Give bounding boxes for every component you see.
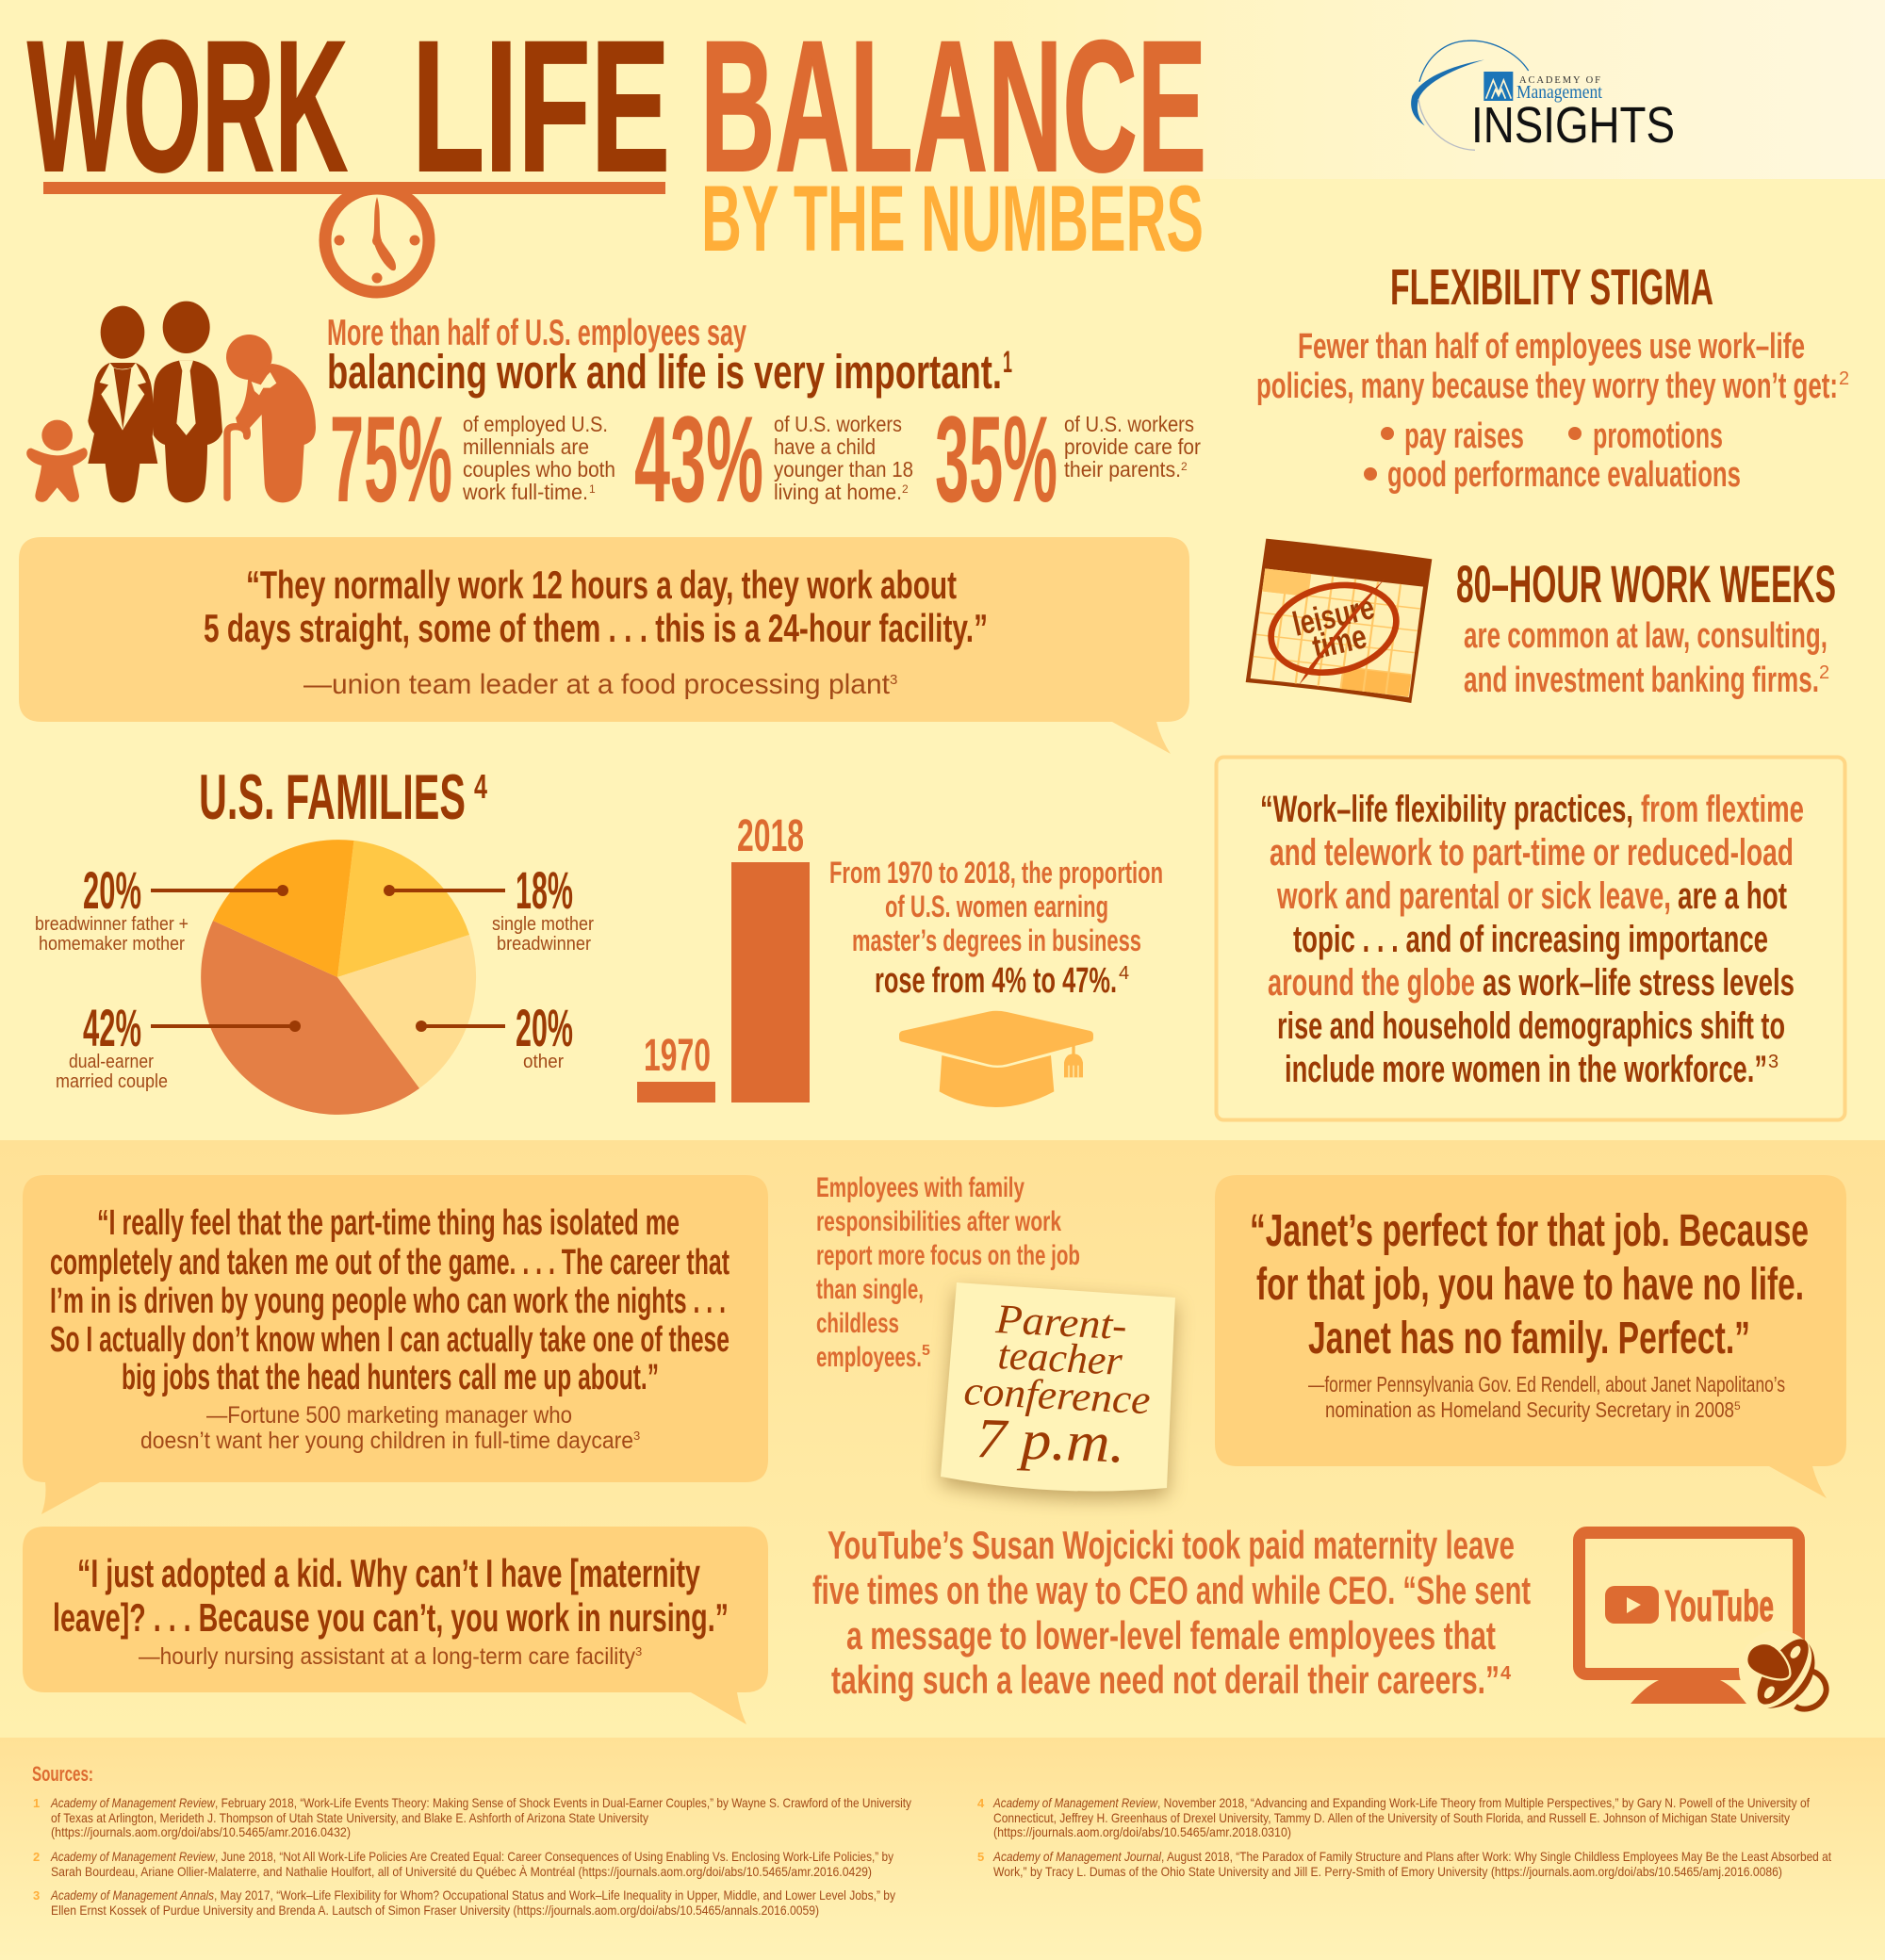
bar chart: women earning master's degrees: 1970 [644,1031,711,1081]
text block: work-life importance: 1 [1003,345,1012,379]
list: what employees worry about: pay raises [1404,416,1524,456]
sticky note: parent-teacher conference: conference [962,1367,1152,1423]
heading: u.s. families: U.S. FAMILIES [199,761,466,833]
callout: union team leader quote [19,537,1189,754]
text block: employees with family responsibilities: childless [816,1308,899,1339]
icon: youtube logo [1605,1581,1774,1630]
list: what employees worry about: promotions [1593,416,1723,456]
label: 20 percent breadwinner father: homemaker mother [39,934,185,955]
statistic: 35 percent: 2 [1181,460,1188,473]
icon: man [153,302,222,502]
label: 20 percent breadwinner father: 20% [83,860,141,920]
text block: sources [32,1762,1831,1918]
list: what employees worry about [1364,416,1741,495]
text block: employees with family responsibilities: Employees with family [816,1172,1024,1203]
source 1 [33,1795,911,1839]
callout: marketing manager quote: —Fortune 500 marketing manager who [206,1402,572,1429]
callout: marketing manager quote: completely and taken me out of the game. . . . The career that [50,1243,729,1282]
callout: janet napolitano quote [1215,1175,1846,1498]
callout: nursing assistant quote [23,1527,768,1724]
statistic: 43 percent: of U.S. workers [774,412,902,436]
callout: marketing manager quote: big jobs that the head hunters call me up about.” [122,1358,659,1397]
source 1: 1 [33,1796,40,1810]
statistic: 35 percent: of U.S. workers [1064,412,1194,436]
icon: pacifier [1739,1630,1827,1712]
icon: elderly man with cane [226,335,316,502]
source 2 [33,1849,893,1879]
callout: marketing manager quote: “I really feel that the part-time thing has isolated me [97,1203,680,1243]
text block: employees with family responsibilities: report more focus on the job [816,1240,1080,1271]
icon: academy of management insights logo: Management [1516,82,1602,103]
heading: u.s. families: 4 [474,767,487,806]
statistic: 75 percent: of employed U.S. [463,412,608,436]
text block: women's master's degrees: From 1970 to 2018, the proportion [829,856,1163,890]
statistic: 35 percent: their parents. [1064,457,1181,482]
label: 20 percent breadwinner father [35,860,288,955]
callout: janet napolitano quote: nomination as Homeland Security Secretary in 2008 [1325,1397,1734,1422]
callout: marketing manager quote: So I actually don’t know when I can actually take one of these [50,1320,729,1360]
icon: graduation cap [899,1011,1093,1107]
title: BY THE NUMBERS [701,166,1204,270]
source 2: Sarah Bourdeau, Ariane Ollier-Malaterre, and Nathalie Houlfort, all of Université du Québec À Montréal (https://journals.aom.org/doi/abs/10.5465/amr.2016.0429) [51,1864,872,1879]
source 1: of Texas at Arlington, Merideth J. Thompson of Utah State University, and Blake E. Ashforth of Arizona State University [51,1810,648,1825]
text block: employees with family responsibilities [816,1172,1080,1373]
text block: policy use: 2 [1839,368,1849,389]
source 3: , May 2017, “Work–Life Flexibility for Whom? Occupational Status and Work–Life Inequality in Upper, Middle, and Lower Level Jobs,” by [214,1887,895,1903]
statistic: 75 percent: work full-time. [462,480,588,504]
source 3: Academy of Management Annals [50,1887,214,1903]
bar chart: women earning master's degrees [637,811,810,1102]
label: 18 percent single mother: single mother [492,914,594,935]
title: WORK [27,2,348,210]
label: 42 percent dual-earner: dual-earner [69,1052,154,1072]
statistic: 43 percent: younger than 18 [774,457,913,482]
text block: employees with family responsibilities: than single, [816,1274,924,1305]
text block: youtube maternity leave [812,1523,1531,1702]
icon: family figures [26,302,316,502]
icon: academy of management insights logo: ACADEMY OF [1519,75,1600,86]
text block: 80-hour work weeks [1456,554,1836,700]
icon: youtube logo: YouTube [1664,1581,1774,1630]
source 1: Academy of Management Review [50,1795,216,1810]
source 3 [33,1887,895,1918]
statistic: 43 percent: 43% [634,390,763,528]
source 4: 4 [977,1796,985,1810]
text block: employees with family responsibilities: 5 [922,1343,930,1359]
source 2: 2 [33,1850,40,1864]
panel: work-life flexibility quote: are a hot [1678,875,1787,917]
text block: women's master's degrees: master’s degrees in business [852,923,1141,957]
statistic: 43 percent: have a child [774,434,876,459]
icon: monitor with youtube logo and pacifier [1580,1532,1827,1712]
callout: nursing assistant quote: leave]? . . . Because you can’t, you work in nursing.” [53,1595,729,1640]
sticky note: parent-teacher conference: teacher [996,1331,1124,1384]
source 3: Ellen Ernst Kossek of Purdue University and Brenda A. Lautsch of Simon Fraser University (https://journals.aom.org/doi/abs/10.5465/annals.2016.0059) [51,1903,819,1918]
source 4: Academy of Management Review [992,1795,1158,1810]
statistic: 43 percent: living at home. [774,480,902,504]
text block: women's master's degrees: rose from 4% to 47%. [875,961,1117,1001]
callout: marketing manager quote [23,1175,768,1514]
text block: youtube maternity leave: five times on the way to CEO and while CEO. “She sent [812,1568,1531,1612]
source 5: 5 [977,1850,984,1864]
text block: work-life importance: balancing work and life is very important. [327,345,1002,399]
text block: women's master's degrees: 4 [1119,963,1129,984]
panel: work-life flexibility quote [1216,758,1845,1119]
title: LIFE [412,2,670,210]
heading: u.s. families [199,761,487,833]
statistic: 35 percent: provide care for [1064,434,1201,459]
text block: youtube maternity leave: 4 [1500,1663,1512,1684]
icon: woman [88,306,157,502]
panel: work-life flexibility quote: from flextime [1641,789,1804,830]
icon: crossed-out leisure time calendar: time [1309,616,1370,666]
source 5: Academy of Management Journal [992,1849,1162,1864]
source 5: Work,” by Tracy L. Dumas of the Ohio State University and Jill E. Perry-Smith of Emory University (https://journals.aom.org/doi/abs/10.5465/amj.2016.0086) [993,1864,1782,1879]
statistic: 75 percent: 75% [330,390,452,528]
text block: women's master's degrees [829,856,1163,1001]
sticky note: parent-teacher conference: 7 p.m. [975,1407,1126,1475]
text block: 80-hour work weeks: 2 [1819,662,1829,683]
icon: academy of management insights logo [1411,41,1675,154]
callout: nursing assistant quote: “I just adopted a kid. Why can’t I have [maternity [77,1551,700,1595]
pie chart: u.s. families [35,840,594,1115]
title [27,2,1206,270]
sticky note: parent-teacher conference: Parent- [993,1296,1128,1348]
text block: youtube maternity leave: YouTube’s Susan Wojcicki took paid maternity leave [828,1523,1515,1567]
label: 42 percent dual-earner [56,998,301,1092]
text block: youtube maternity leave: a message to lower-level female employees that [846,1613,1496,1658]
title: BALANCE [700,2,1206,210]
panel: work-life flexibility quote: work and parental or sick leave, [1276,875,1671,917]
label: 20 percent other: other [523,1052,564,1072]
statistic: 75 percent: 1 [589,482,596,496]
icon: clock balancing a beam [43,182,665,292]
label: 42 percent dual-earner: married couple [56,1071,168,1092]
label: 20 percent other [416,998,573,1072]
source 4 [977,1795,1810,1839]
source 5 [977,1849,1831,1879]
panel: work-life flexibility quote: 3 [1768,1052,1778,1072]
icon: academy of management insights logo: INSIGHTS [1471,97,1675,154]
callout: union team leader quote: 3 [890,672,897,688]
label: 20 percent other: 20% [516,998,573,1057]
callout: union team leader quote: —union team leader at a food processing plant [303,669,891,700]
callout: union team leader quote: 5 days straight, some of them . . . this is a 24-hour facility.” [204,606,988,650]
text block: work-life importance [327,313,1012,399]
callout: marketing manager quote: doesn’t want her young children in full-time daycare [140,1428,633,1454]
source 1: , February 2018, “Work-Life Events Theory: Making Sense of Shock Events in Dual-Earner Couples,” by Wayne S. Crawford of the University [215,1795,911,1810]
source 2: , June 2018, “Not All Work-Life Policies Are Created Equal: Career Consequences of Using Enabling Vs. Enclosing Work-Life Policies,” by [215,1849,893,1864]
callout: nursing assistant quote: 3 [635,1644,642,1658]
text block: sources: Sources: [32,1762,93,1786]
text block: work-life importance: More than half of U.S. employees say [327,313,746,353]
text block: employees with family responsibilities: employees. [816,1342,922,1373]
panel: work-life flexibility quote: around the globe [1268,962,1475,1004]
source 4: (https://journals.aom.org/doi/abs/10.5465/amr.2018.0310) [993,1824,1291,1839]
callout: nursing assistant quote: —hourly nursing assistant at a long-term care facility [139,1643,635,1670]
callout: marketing manager quote: 3 [633,1429,640,1443]
text block: women's master's degrees: of U.S. women earning [885,890,1108,923]
statistic: 75 percent: millennials are [463,434,589,459]
panel: flexibility stigma [1256,259,1849,495]
label: 42 percent dual-earner: 42% [83,998,141,1057]
source 3: 3 [33,1888,40,1903]
bar chart: women earning master's degrees: 2018 [737,811,804,861]
text block: youtube maternity leave: taking such a leave need not derail their careers.” [831,1658,1500,1702]
icon: child [26,420,88,502]
source 1: (https://journals.aom.org/doi/abs/10.5465/amr.2016.0432) [51,1824,351,1839]
callout: union team leader quote: “They normally work 12 hours a day, they work about [246,563,957,607]
icon: crossed-out leisure time calendar: leisure [1289,587,1378,644]
statistic: 75 percent: couples who both [463,457,615,482]
label: 20 percent breadwinner father: breadwinner father + [35,914,188,935]
statistic: 43 percent: 2 [902,482,909,496]
callout: janet napolitano quote: 5 [1734,1399,1741,1413]
panel: work-life flexibility quote: “Work–life flexibility practices, [1260,789,1633,830]
text block: policy use [1256,327,1849,406]
callout: marketing manager quote: I’m in is driven by young people who can work the nights . . . [50,1282,726,1321]
label: 18 percent single mother [384,860,594,955]
label: 18 percent single mother: breadwinner [497,934,591,955]
source 2: Academy of Management Review [50,1849,216,1864]
label: 18 percent single mother: 18% [516,860,573,920]
text block: employees with family responsibilities: responsibilities after work [816,1206,1061,1237]
sticky note: parent-teacher conference [941,1282,1175,1492]
statistic: 35 percent: 35% [935,390,1057,528]
icon: crossed-out leisure time calendar [1246,539,1432,703]
